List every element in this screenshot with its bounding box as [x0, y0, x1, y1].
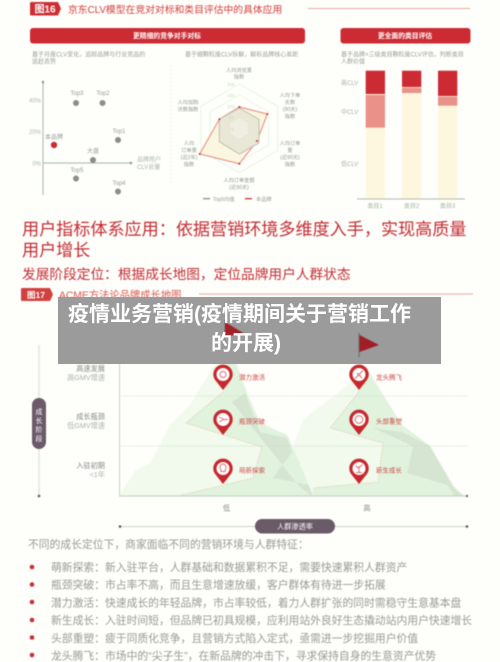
figure 17 header [21, 288, 473, 302]
radar chart: 200 [227, 82, 235, 87]
radar chart: 指数 [234, 72, 245, 80]
x axis low and high labels [223, 504, 371, 512]
overlay title: 的开展) [211, 332, 281, 355]
radar chart: 人均加购 [178, 98, 198, 106]
growth stage labels: 低GMV增速 [67, 421, 105, 430]
heading: user metric system [22, 220, 466, 260]
overlay title [68, 303, 411, 355]
radar chart: 100 [227, 104, 235, 109]
subheading: development stage: 发展阶段定位：根据成长地图，定位品牌用户人群状态 [22, 266, 351, 282]
panel descriptions: 基于品牌×三级类目颗粒度CLV评估，判断类目 [341, 50, 464, 58]
radar chart: 人均 [184, 139, 194, 147]
pin labels: 萌新探索 [239, 466, 266, 474]
vertical axis: growth stage: 长 [36, 416, 42, 425]
pin: potential activation [213, 365, 233, 390]
horizontal axis: audience penetration [119, 519, 468, 534]
scatter chart: Top1 [112, 129, 126, 135]
flag: low penetration [225, 320, 245, 345]
panel descriptions [32, 50, 464, 66]
scatter chart [29, 80, 161, 195]
pin labels: 潜力激活 [239, 372, 266, 382]
figure 16 header: 京东CLV模型在竞对对标和类目评估中的具体应用 [68, 3, 282, 16]
bullet list: 头部重塑：疲于同质化竞争，且营销方式陷入定式，亟需进一步挖掘用户价值 [51, 631, 418, 645]
x axis low and high labels: 低 [223, 504, 230, 512]
panel descriptions: 基于月度CLV变化，追踪品牌与行业竞品的 [32, 50, 145, 58]
x axis low and high labels: 高 [363, 504, 371, 512]
pin labels: 龙头腾飞 [376, 372, 402, 382]
pin: top reshaping [349, 410, 369, 435]
radar chart: 人均订单金额 [223, 176, 255, 184]
growth stage labels: <1年 [90, 470, 105, 479]
radar chart [178, 66, 300, 203]
vertical axis: growth stage: 成 [36, 407, 42, 416]
panel: category evaluation banner [340, 28, 470, 44]
intro sentence: 不同的成长定位下，商家面临不同的营销环境与人群特征： [28, 537, 309, 551]
title overlay band [58, 297, 441, 364]
radar chart: 次数指数 [178, 105, 199, 113]
growth stage labels: 入驻初期 [76, 461, 105, 470]
stacked bar chart: 类目1 [367, 202, 383, 210]
radar chart: 50 [228, 115, 234, 120]
panel: competitor benchmarking banner [30, 28, 305, 44]
vertical axis: growth stage: 段 [36, 434, 42, 443]
radar chart: (近90天) [280, 153, 300, 161]
growth stage labels [67, 364, 105, 479]
scatter chart: 20% [29, 130, 42, 136]
radar chart: 订单量 [181, 146, 197, 154]
bullet list: 瓶颈突破：市占率不高，而且生意增速放缓，客户群体有待进一步拓展 [51, 578, 386, 592]
panel descriptions: 人群价值 [341, 58, 365, 66]
radar chart: 本品牌 [256, 195, 272, 203]
bullet list: 萌新探索：新入驻平台，人群基础和数据累积不足，需要快速累积人群资产 [51, 560, 407, 574]
growth stage labels: 高GMV增速 [67, 373, 105, 382]
heading: user metric system: 用户增长 [22, 241, 90, 260]
panel descriptions: 基于细颗粒度CLV拆解，解析品牌核心差距 [185, 50, 298, 58]
horizontal axis: audience penetration: 人群渗透率 [277, 522, 313, 531]
stacked bar chart: 低CLV [341, 160, 358, 168]
panel: competitor benchmarking banner: 更精细的竞争对手对标 [133, 31, 201, 40]
radar chart: (90天) [283, 106, 297, 113]
stacked bar chart [341, 71, 465, 210]
figure 16 header [30, 2, 470, 16]
bullet list [30, 560, 472, 662]
scatter chart: 大盘 [87, 147, 99, 155]
radar chart: 人均下单 [280, 91, 300, 99]
pin: new growth [349, 459, 369, 484]
pin labels: 新生成长 [376, 466, 402, 474]
stacked bar chart: 类目3 [440, 202, 456, 210]
stacked bar chart: 中CLV [341, 108, 358, 116]
radar chart: 150 [227, 93, 235, 98]
scatter chart: 品牌用户 [137, 156, 161, 164]
pin: bottleneck breakthrough [213, 410, 233, 435]
scatter chart: Top3 [70, 91, 84, 97]
radar chart: 人均浏览量 [226, 66, 252, 74]
radar chart: 量 [287, 147, 293, 154]
radar chart: (近2年) [181, 153, 198, 161]
stacked bar chart: 高CLV [341, 79, 358, 87]
heading: user metric system: 用户指标体系应用：依据营销环境多维度入手，实现高质量 [22, 220, 466, 239]
radar chart: (近90天) [229, 183, 249, 191]
panel: category evaluation banner: 更全面的类目评估 [378, 31, 432, 40]
scatter chart: Top5 [70, 168, 84, 174]
overlay title: 疫情业务营销(疫情期间关于营销工作 [68, 303, 411, 326]
radar chart: 指数 [285, 112, 296, 120]
scatter chart: Top4 [112, 181, 126, 187]
radar chart: 指数 [184, 160, 195, 168]
flag: high penetration [359, 333, 379, 357]
growth stage labels: 成长瓶颈 [76, 412, 105, 421]
pin: leader soaring [349, 365, 369, 390]
radar chart: 0 [231, 127, 234, 132]
scatter chart: 本品牌 [45, 133, 63, 141]
pin: newcomer exploration [213, 459, 233, 484]
stacked bar chart: 类目2 [404, 202, 420, 210]
radar chart: 指数 [285, 160, 296, 168]
pin labels [239, 372, 402, 474]
figure 17 header: 图17 [27, 290, 45, 300]
panel descriptions: 追赶态势 [32, 58, 56, 66]
vertical axis: growth stage [32, 345, 46, 497]
bullet list: 潜力激活：快速成长的年轻品牌，市占率较低，着力人群扩张的同时需稳守生意基本盘 [51, 596, 461, 610]
scatter chart: CLV总量 [137, 163, 160, 171]
pin labels: 瓶颈突破 [239, 416, 266, 426]
vertical axis: growth stage: 阶 [36, 425, 42, 434]
growth stage labels: 高速发展 [76, 364, 105, 373]
pin labels: 头部重塑 [376, 416, 402, 426]
radar chart: Top5均值 [213, 195, 235, 203]
radar chart: 人均订单 [280, 139, 300, 147]
scatter chart: Top2 [96, 91, 110, 97]
bullet list: 新生成长：入驻时间短，但品牌已初具规模，应利用站外良好生态撬动站内用户快速增长 [51, 613, 472, 627]
chart axes [119, 345, 468, 497]
figure 17 header: ACME方法论品牌成长地图 [59, 288, 181, 302]
radar chart: 天数 [285, 98, 296, 106]
growth map mountains [119, 345, 465, 496]
scatter chart: 40% [29, 98, 42, 104]
figure 16 header: 图16 [34, 4, 56, 16]
scatter chart: 0% [32, 162, 42, 168]
